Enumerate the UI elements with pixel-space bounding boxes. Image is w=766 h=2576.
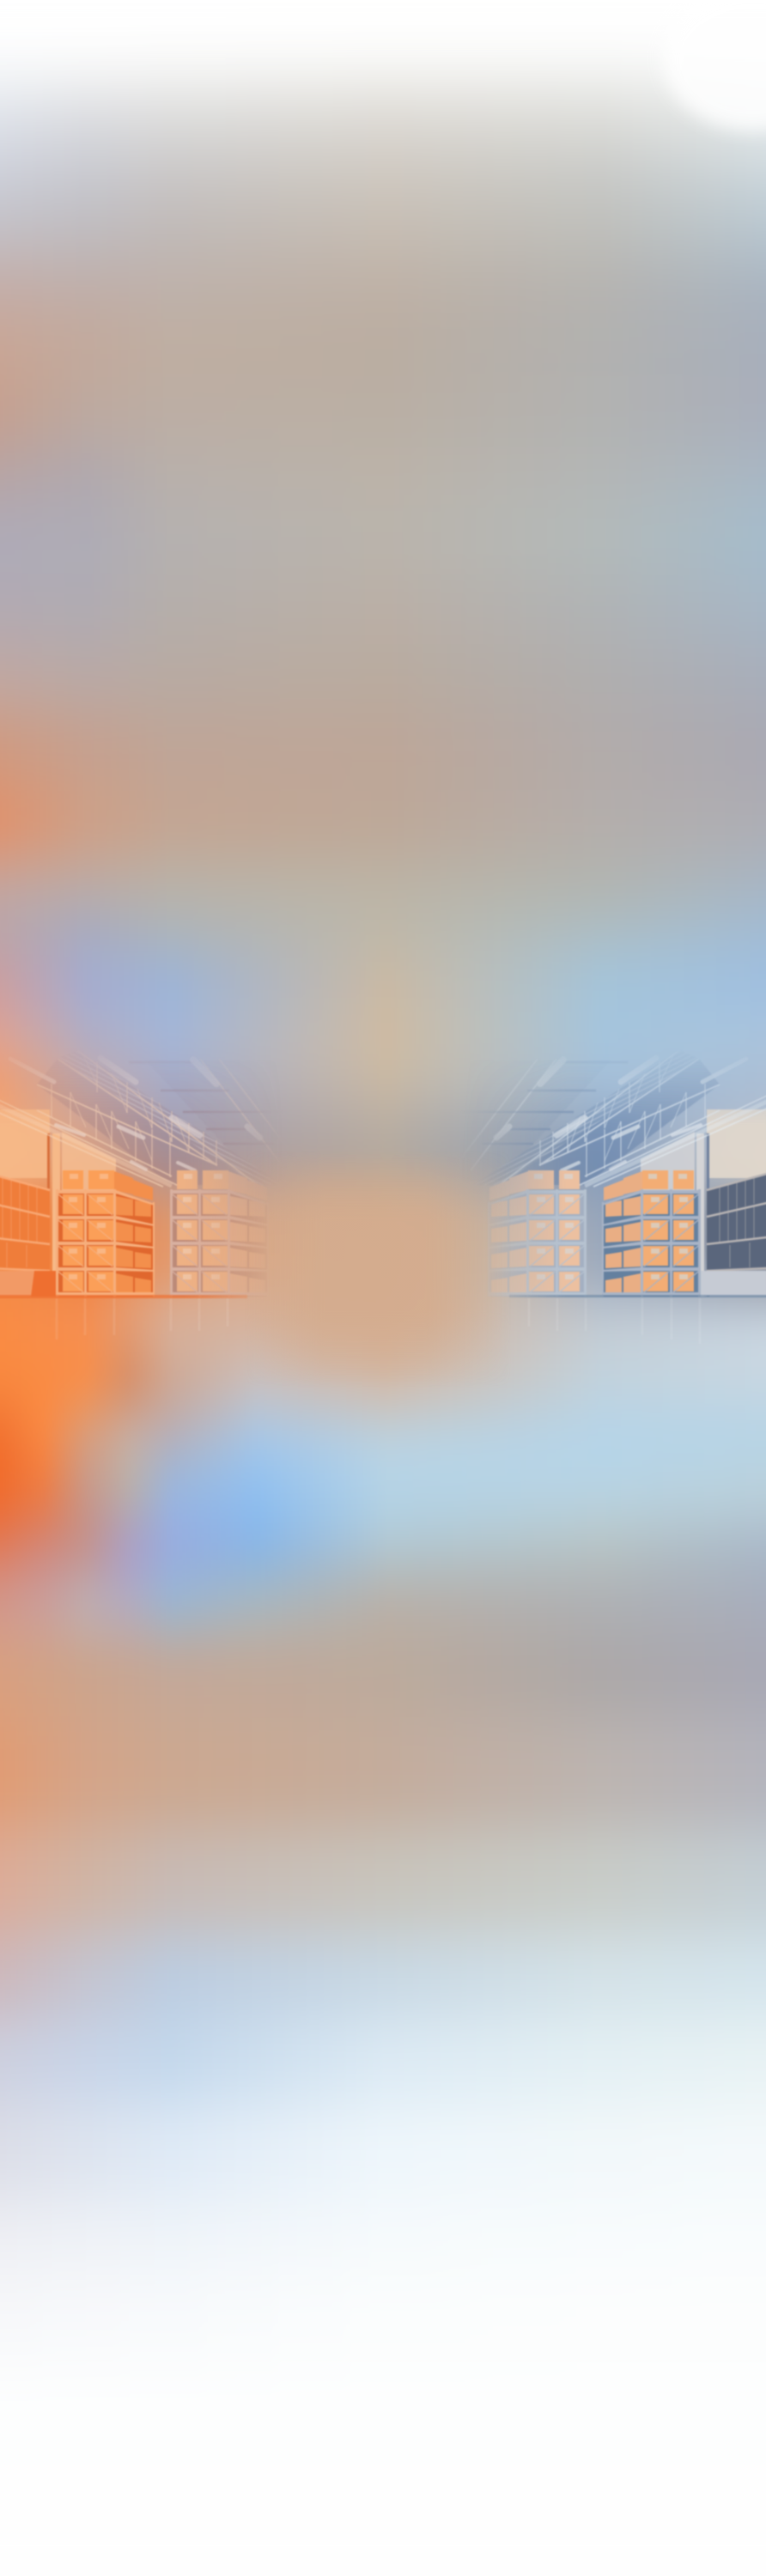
- ceiling trusses and lights: [491, 1061, 766, 1188]
- floor reflections: [57, 1298, 700, 1344]
- floor line: [509, 1295, 766, 1297]
- near shelving rack: [56, 1170, 155, 1297]
- warehouse scene with soft fade: [0, 1050, 766, 1298]
- wall and slatted racking: [641, 1109, 766, 1297]
- white corner blob: [663, 0, 766, 131]
- ceiling trusses and lights: [0, 1060, 263, 1188]
- near shelving rack: [602, 1170, 701, 1297]
- floor line: [0, 1295, 247, 1298]
- right half: mirrored blue-grey tint: [489, 1061, 766, 1298]
- far shelving rack: [170, 1170, 269, 1297]
- left half: orange tint: [0, 1060, 263, 1299]
- wall and slatted racking: [0, 1109, 116, 1297]
- far shelving rack: [488, 1170, 587, 1297]
- central fog: [300, 1171, 493, 1365]
- warehouse illustration: [0, 1060, 766, 1340]
